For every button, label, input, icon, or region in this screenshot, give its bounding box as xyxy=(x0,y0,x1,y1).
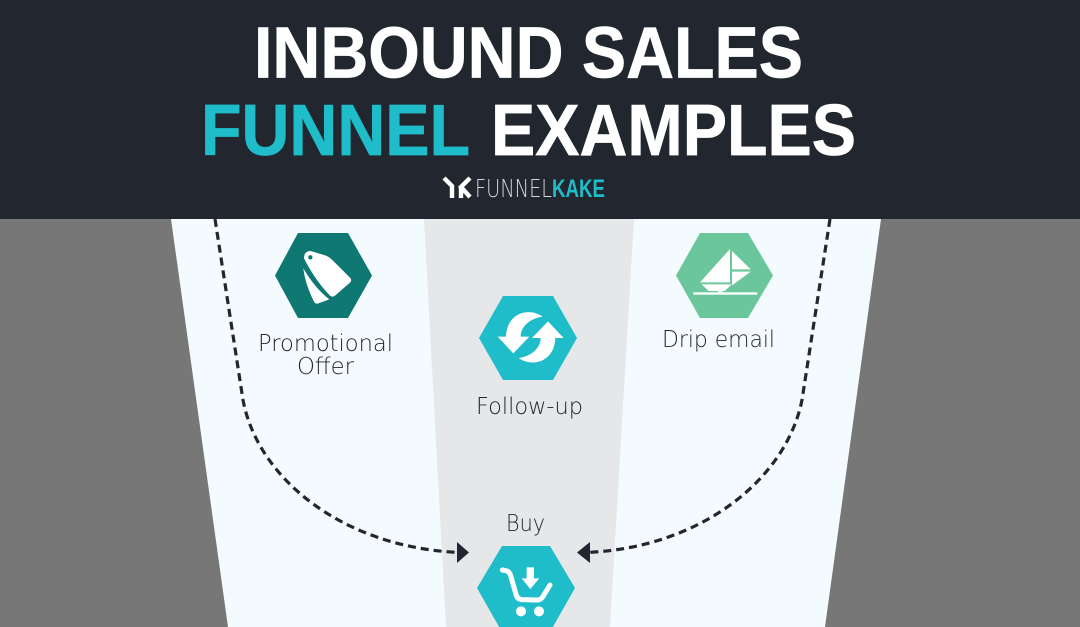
title: INBOUND SALES xyxy=(254,14,803,94)
header band xyxy=(0,0,1080,219)
step: Drip email xyxy=(662,233,775,353)
arrow: right dashed path to Buy xyxy=(577,219,830,563)
icon: shopping cart hexagon xyxy=(477,546,575,627)
label: Follow-up: Follow-up xyxy=(476,394,583,420)
icon: paper boat hexagon xyxy=(676,233,773,318)
title: EXAMPLES xyxy=(491,91,856,171)
funnel body xyxy=(171,219,881,627)
logo: FunnelKake: KAKE xyxy=(552,175,605,203)
label: Drip email: Drip email xyxy=(662,327,775,353)
step: Follow-up xyxy=(476,296,583,420)
icon: refresh hexagon xyxy=(479,296,577,380)
label: Promotional Offer xyxy=(258,331,393,380)
logo: FunnelKake: FUNNEL xyxy=(475,174,552,203)
icon: price tag hexagon xyxy=(275,233,372,318)
title: FUNNEL xyxy=(201,91,470,171)
step: Buy xyxy=(477,511,575,627)
step: Promotional Offer xyxy=(258,233,393,380)
label: Promotional Offer: Promotional xyxy=(258,331,393,357)
label: Promotional Offer: Offer xyxy=(297,354,355,380)
logo: FunnelKake xyxy=(444,174,605,203)
label: Buy: Buy xyxy=(506,511,545,537)
arrow: left dashed path to Buy xyxy=(215,219,469,563)
title xyxy=(201,14,856,171)
